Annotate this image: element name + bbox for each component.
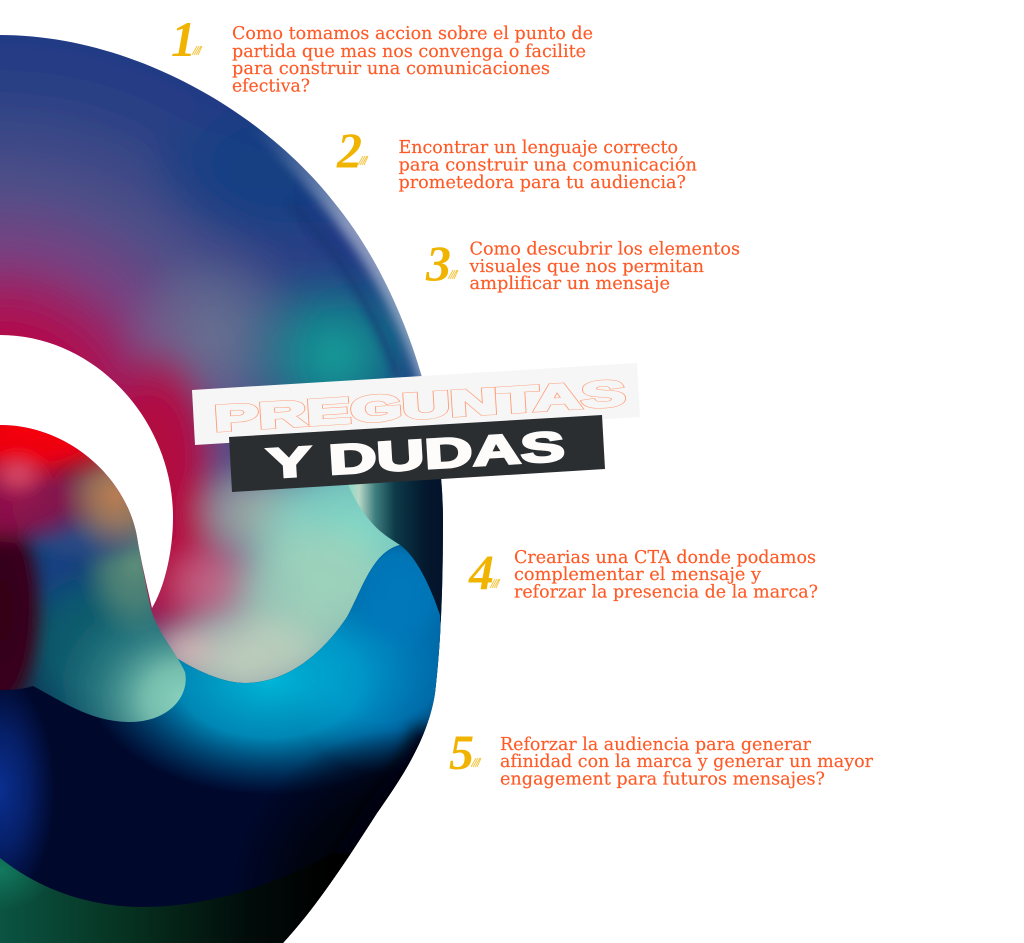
question 2 (336, 122, 697, 193)
text 4: complementar el mensaje y (514, 564, 762, 585)
number 5: 5 (449, 724, 474, 780)
text 4 (514, 547, 818, 602)
text 4: reforzar la presencia de la marca? (514, 582, 818, 602)
solid title words: Y DUDAS (266, 422, 566, 487)
text 1: efectiva? (232, 76, 310, 96)
question 4 (468, 544, 818, 602)
number 2: 2 (336, 122, 362, 178)
text 5: Reforzar la audiencia para generar (500, 734, 811, 755)
text 1 (232, 23, 593, 96)
organic gradient torus shape (0, 35, 443, 943)
lower blue body (0, 545, 440, 943)
banner: Y dudas (229, 415, 605, 492)
text 2: Encontrar un lenguaje correcto (398, 137, 678, 158)
text 3: visuales que nos permitan (469, 256, 704, 277)
dark right edge with light streak (348, 479, 443, 622)
icon: hatch marks 4 (490, 579, 500, 588)
text 2 (398, 137, 697, 193)
question 1 (171, 11, 593, 96)
upper ring and pale fold, softly blended (0, 35, 443, 718)
left blob: red to teal (0, 425, 186, 722)
text 1: para construir una comunicaciones (232, 58, 550, 79)
icon: hatch marks 5 (471, 758, 481, 767)
text 3: amplificar un mensaje (470, 273, 670, 294)
text 2: prometedora para tu audiencia? (398, 172, 686, 193)
icon: hatch marks 1 (192, 46, 202, 55)
icon: hatch marks 2 (358, 156, 368, 165)
text 5 (500, 734, 873, 790)
outlined title word: PREGUNTAS (213, 372, 627, 439)
text 1: partida que mas nos convenga o facilite (232, 41, 586, 62)
question 3 (425, 235, 740, 294)
number 3: 3 (425, 235, 451, 291)
banner: Preguntas (192, 363, 640, 445)
edge haze on outer ring (260, 131, 422, 376)
outlined title word: PREGUNTAS (213, 372, 627, 439)
text 3 (469, 238, 740, 294)
bottom green band (0, 853, 351, 943)
icon: hatch marks 3 (448, 270, 458, 279)
text 3: Como descubrir los elementos (470, 238, 740, 260)
text 5: engagement para futuros mensajes? (500, 768, 825, 790)
text 4: Crearias una CTA donde podamos (514, 547, 816, 568)
number 1: 1 (171, 11, 196, 67)
text 1: Como tomamos accion sobre el punto de (232, 23, 593, 44)
question 5 (449, 724, 873, 790)
number 4: 4 (468, 544, 494, 600)
outlined title word (213, 372, 627, 439)
dark crease on outer ring (290, 203, 397, 375)
text 2: para construir una comunicación (398, 154, 697, 176)
text 5: afinidad con la marca y generar un mayor (500, 751, 873, 772)
